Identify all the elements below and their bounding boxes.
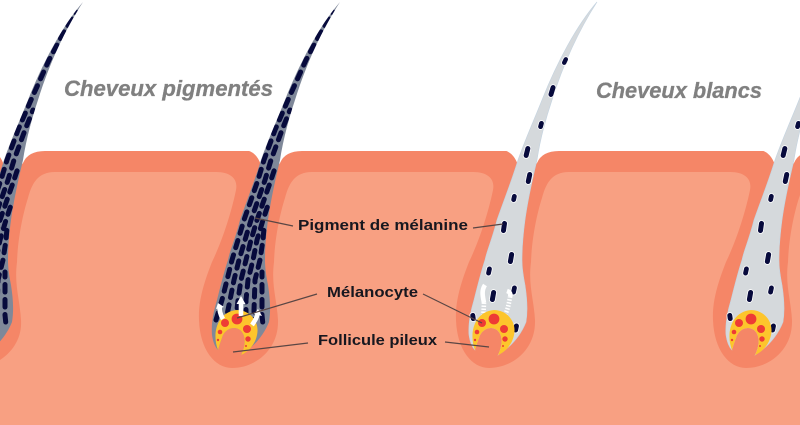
gaps between skin ridges	[0, 150, 800, 178]
heading: white hair: Cheveux blancs	[596, 78, 762, 103]
leader lines	[233, 218, 503, 352]
pigmented hair with melanocyte	[212, 2, 340, 362]
label: melanin pigment: Pigment de mélanine	[298, 217, 468, 234]
icon: white arrows, pigment moving up	[216, 296, 262, 325]
label: melanocyte: Mélanocyte	[327, 284, 418, 301]
white hair with melanocyte	[469, 2, 597, 362]
pigmented hair, left, cropped	[0, 2, 83, 355]
faded white pigment trails	[483, 285, 510, 322]
skin layer background	[0, 151, 800, 425]
heading: pigmented hair: Cheveux pigmentés	[64, 76, 273, 101]
label: hair follicle: Follicule pileux	[318, 332, 438, 349]
white hair, right, cropped	[726, 2, 800, 362]
inner dermis with follicle outlines	[0, 172, 800, 425]
